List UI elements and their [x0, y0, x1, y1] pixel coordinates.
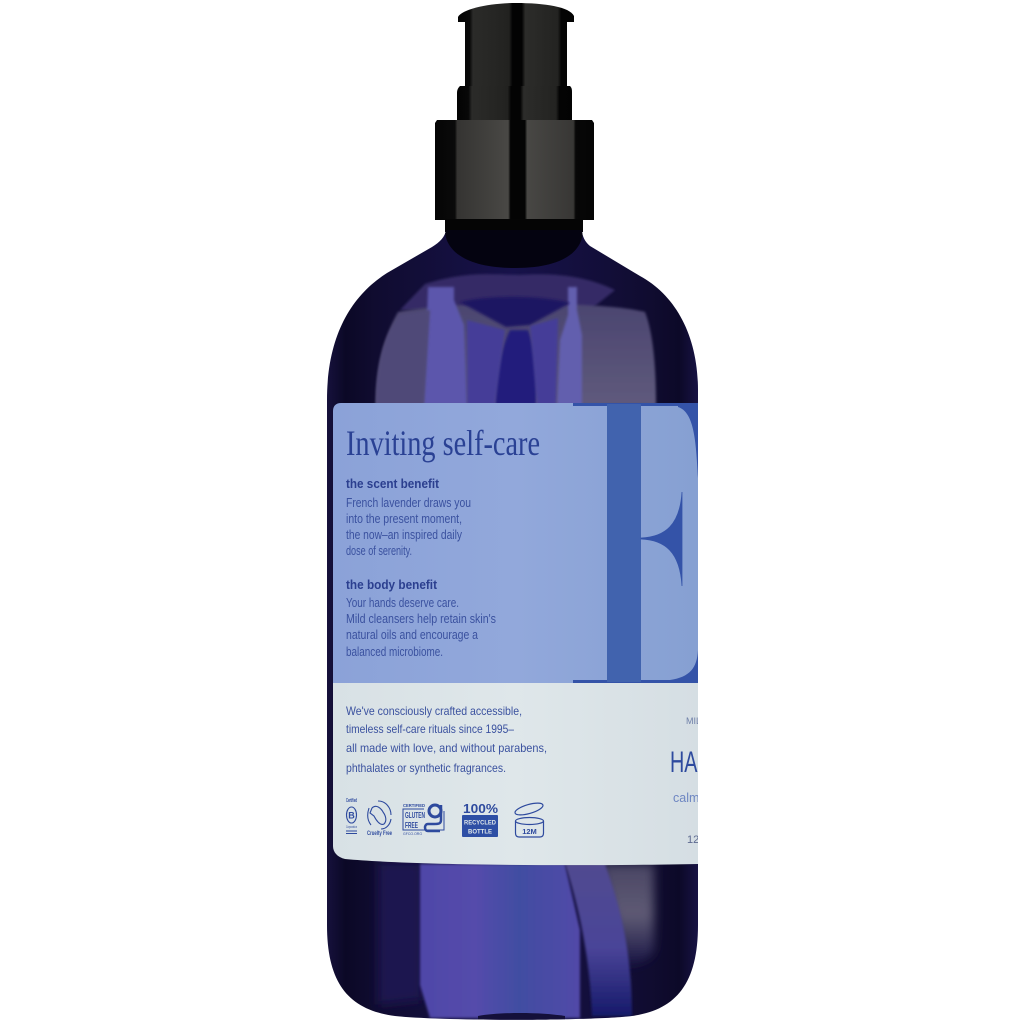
body copy: natural oils and encourage a [346, 628, 478, 642]
scent copy [346, 496, 471, 558]
icon: 100% recycled bottle: BOTTLE [468, 830, 492, 836]
pump head [458, 3, 574, 88]
letter bottom-right serif [670, 650, 698, 680]
subheading: scent: the scent benefit [346, 476, 440, 491]
icon: 100% recycled bottle [462, 802, 498, 837]
wrap label [333, 403, 698, 868]
letter top and bottom band [573, 403, 698, 684]
icon: 100% recycled bottle: RECYCLED [464, 820, 497, 826]
text block: the body benefit [346, 577, 496, 659]
scent copy: into the present moment, [346, 512, 462, 526]
icon: certified gluten free [403, 803, 444, 836]
icon: certified B corporation: Certified [346, 798, 357, 804]
scent copy: the now–an inspired daily [346, 528, 463, 542]
subheading: body: the body benefit [346, 577, 438, 592]
letter mid serif [641, 492, 682, 586]
icon: cruelty free bunny: Cruelty Free [367, 830, 392, 837]
glass reflections [376, 221, 656, 1022]
body copy: balanced microbiome. [346, 645, 443, 659]
scent line: calming [673, 791, 716, 805]
icon: certified gluten free: GFCO.ORG [403, 832, 422, 836]
icon: certified gluten free: GLUTEN [405, 810, 425, 820]
scent copy: dose of serenity. [346, 544, 412, 558]
text block: brand statement: We've consciously crafted accessible, [346, 704, 522, 718]
icon: certified gluten free: CERTIFIED [403, 803, 426, 808]
front label text cropped at bottle edge [670, 716, 726, 846]
body copy: Your hands deserve care. [346, 596, 459, 610]
heading: Inviting self-care: Inviting self-care [346, 423, 540, 463]
icon: certified B corporation: B [348, 810, 355, 820]
large cropped letter E [573, 403, 698, 684]
text block: brand statement: all made with love, and without parabens, [346, 741, 547, 755]
white label panel [333, 683, 698, 868]
volume: 12 fl [687, 834, 708, 846]
letter stem [607, 404, 641, 682]
text block: brand statement [346, 704, 547, 775]
body copy: Mild cleansers help retain skin's [346, 612, 496, 626]
icon: certified B corporation [346, 798, 357, 834]
glass silhouette [327, 230, 698, 1020]
body copy [346, 596, 496, 659]
icon: cruelty free bunny [367, 801, 392, 837]
collar thread ring [445, 219, 583, 232]
letter top-right serif [678, 405, 698, 478]
icon: 12 month open jar [514, 801, 544, 837]
pump stem step [457, 86, 572, 120]
icon: certified gluten free: FREE [405, 820, 418, 830]
bottle body [327, 221, 698, 1022]
text block: brand statement: phthalates or synthetic fragrances. [346, 761, 506, 775]
blue label panel [333, 403, 698, 683]
pump collar [435, 120, 594, 220]
product type line: MILD [686, 716, 708, 726]
text block: the scent benefit [346, 476, 471, 558]
icon: certified B corporation: Corporation [346, 824, 357, 829]
icon: 12 month open jar: 12M [522, 827, 537, 836]
pump dispenser [435, 3, 594, 232]
icon: 100% recycled bottle: 100% [463, 802, 498, 816]
scent copy: French lavender draws you [346, 496, 471, 510]
text block: brand statement: timeless self-care rituals since 1995– [346, 722, 514, 736]
